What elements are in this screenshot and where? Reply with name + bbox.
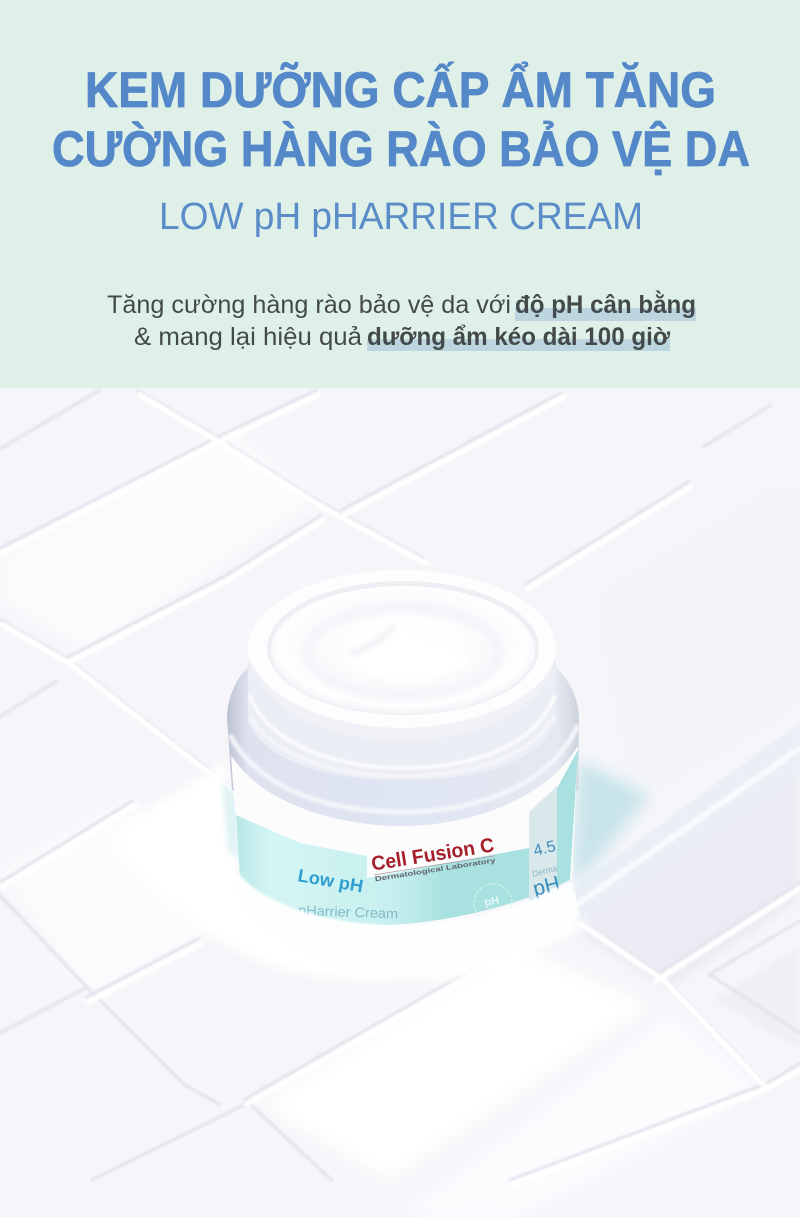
pH value: pH	[531, 872, 562, 901]
title	[52, 61, 750, 177]
cream surface	[267, 581, 539, 715]
shaded tile faces	[560, 770, 800, 990]
pH value	[531, 838, 562, 901]
teal label band	[236, 750, 578, 925]
jar rim	[248, 570, 556, 728]
description text: dưỡng ẩm kéo dài 100 giờ	[367, 323, 670, 351]
cream mound around jar	[112, 760, 590, 980]
cream jar	[112, 570, 590, 980]
grey pH stripe	[529, 786, 557, 902]
description text: & mang lại hiệu quả	[134, 323, 362, 351]
groove shadows	[0, 390, 800, 1185]
description text	[107, 289, 696, 351]
subtitle: LOW pH pHARRIER CREAM	[159, 196, 643, 238]
blue shadow behind jar	[572, 760, 650, 885]
product name: Low pH	[296, 865, 365, 896]
pH value: 4.5	[532, 838, 558, 860]
product name	[296, 865, 398, 921]
label	[231, 746, 578, 925]
bright tile faces	[0, 430, 315, 650]
description text: Tăng cường hàng rào bảo vệ da với	[107, 291, 511, 319]
cream tile background	[0, 388, 800, 1217]
header panel	[0, 0, 800, 388]
glass lip highlight	[230, 725, 578, 812]
product name: pHarrier Cream	[298, 902, 398, 921]
cream band running to right edge	[550, 722, 800, 925]
threaded neck	[248, 660, 556, 780]
pale teal glow left of jar	[222, 780, 240, 860]
cream covering jar base	[232, 872, 580, 973]
description text: độ pH cân bằng	[515, 289, 696, 319]
white label band	[231, 746, 578, 880]
pH badge	[474, 884, 512, 922]
pH value: Derma	[531, 863, 558, 879]
pH badge: pH	[483, 895, 500, 909]
brand logo: Cell Fusion C	[370, 834, 496, 876]
title: KEM DƯỠNG CẤP ẨM TĂNG	[85, 61, 716, 118]
brand logo: Dermatological Laboratory	[374, 857, 496, 883]
jar glass body	[227, 668, 579, 835]
